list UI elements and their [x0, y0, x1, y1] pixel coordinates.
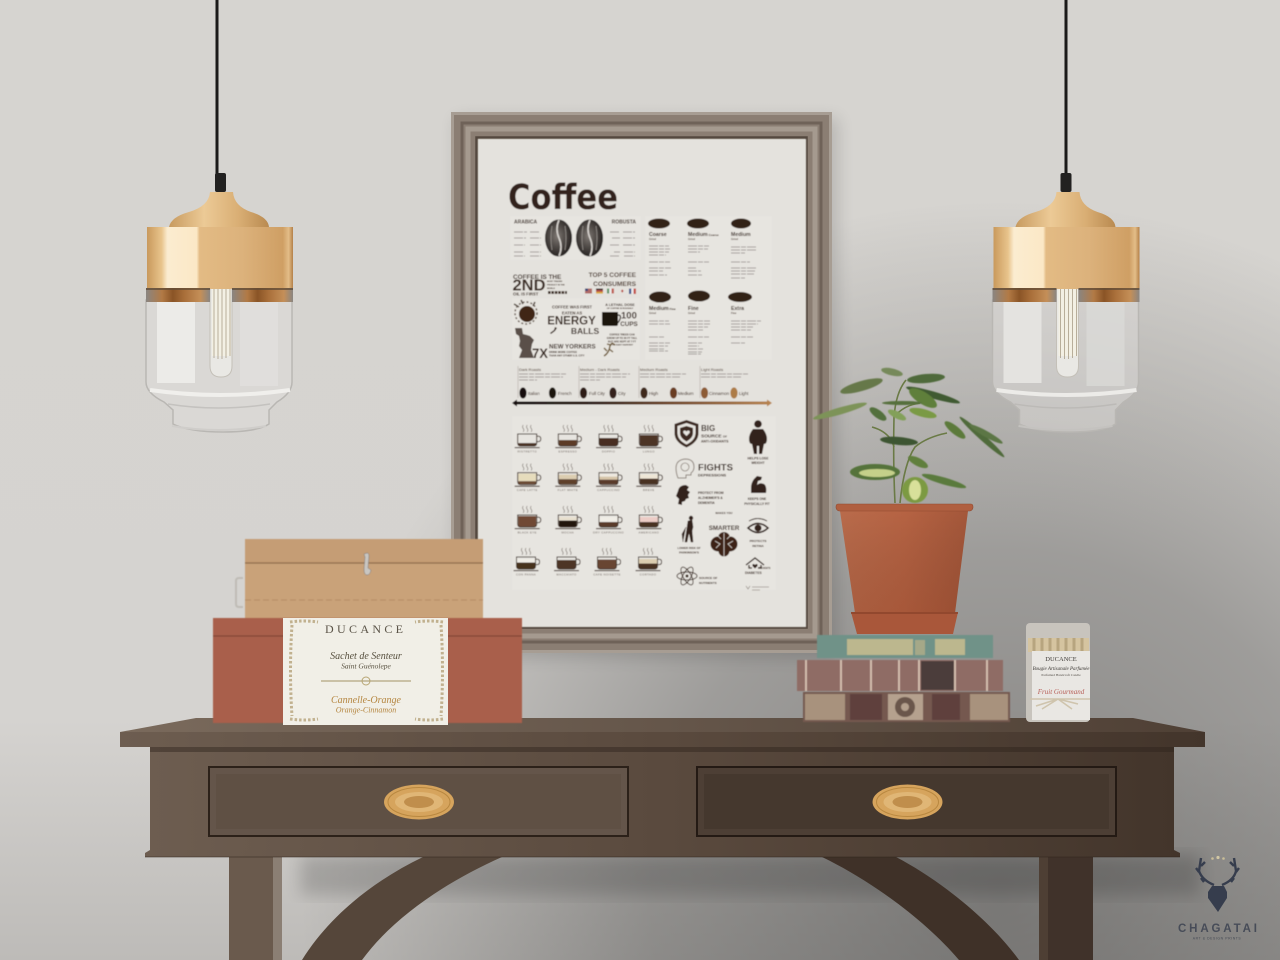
lamp gold cylinder	[994, 227, 1140, 289]
cup: macchiato: MACCHIATO	[556, 572, 577, 576]
cup: cafe noisette	[593, 548, 621, 576]
coffee drinks grid	[514, 425, 662, 576]
table top edge	[120, 732, 1205, 747]
logo deer head and antlers	[1196, 856, 1239, 912]
roast gradient arrow	[512, 400, 772, 406]
grind: extra fine: Extra	[731, 306, 744, 312]
grind: medium-coarse: Medium Coarse	[688, 232, 719, 238]
cup: cappuccino	[596, 464, 622, 492]
wooden picture frame	[451, 112, 832, 653]
health benefits	[674, 420, 771, 590]
fact: coffee first eaten as energy balls: ENERGY	[547, 316, 596, 328]
roast headings: Medium - Dark Roasts	[580, 367, 620, 372]
benefit: muscle arm	[744, 476, 770, 506]
cup: black eye	[515, 506, 541, 534]
roast beans with names: Italian	[528, 391, 540, 396]
benefit: fights depression	[676, 459, 733, 478]
grind: medium-fine	[649, 292, 676, 351]
cup: lungo: LUNGO	[643, 450, 655, 454]
roast headings: Medium Roasts	[640, 367, 668, 372]
fact: coffee is the second most traded product: 2ND	[512, 278, 546, 294]
ducance sachet card	[283, 618, 448, 725]
roast headings: Light Roasts	[701, 367, 723, 372]
roast beans with names: Full City	[589, 391, 606, 396]
fact: coffee trees: GROW UP TO 30 FT TALL	[607, 337, 638, 340]
grind: medium: Grind	[731, 237, 738, 241]
benefit: antioxidants shield	[674, 420, 729, 448]
grind: extra fine	[728, 292, 761, 343]
lamp bulb	[1056, 288, 1078, 377]
lamp glass body	[992, 300, 1138, 432]
illustration: coffee sprig	[604, 343, 615, 356]
fact: 7x new yorkers: THAN ANY OTHER U.S. CITY	[549, 354, 585, 358]
fact: 7x new yorkers: DRINK MORE COFFEE	[549, 350, 577, 354]
benefit: alzheimer's and dementia	[676, 485, 724, 505]
roast beans with names: Cinnamon	[709, 391, 730, 396]
fact: top 5 coffee consumers with flags: CONSUMERS	[593, 281, 637, 288]
lamp copper band	[992, 288, 1140, 302]
brown book	[797, 660, 1003, 691]
roast beans with names: Medium	[678, 391, 694, 396]
benefit: fights depression: DEPRESSIONS	[698, 472, 727, 478]
cup: lungo	[636, 425, 662, 454]
cup: macchiato	[554, 548, 580, 576]
lamp gold cylinder	[147, 227, 293, 289]
left leg	[229, 857, 282, 960]
illustration: statue of liberty	[515, 328, 534, 358]
logo wordmark: CHAGATAI	[1178, 923, 1257, 935]
right curved brace	[822, 857, 1019, 960]
cup: dry cappuccino	[593, 506, 624, 534]
fact: coffee trees: FOR EASY HARVEST	[611, 344, 634, 346]
ornate book	[803, 692, 1010, 722]
roast scale	[512, 366, 772, 406]
card scent text	[331, 695, 402, 714]
lamp copper band	[146, 288, 293, 302]
benefit: weight loss figure: HELPS LOSE	[748, 456, 769, 460]
cup: dry cappuccino: DRY CAPPUCCINO	[593, 530, 624, 534]
benefit: fights depression: FIGHTS	[698, 462, 733, 472]
fact: coffee trees: COFFEE TREES CAN	[609, 334, 635, 336]
table surface	[120, 718, 1205, 732]
benefit: antioxidants shield: SOURCE OF	[701, 434, 727, 440]
benefit: protects retina eye: PROTECTS	[750, 539, 766, 543]
fact: coffee is the second most traded product	[512, 274, 567, 296]
grind: medium: Medium	[731, 232, 751, 238]
benefit: antioxidants shield: BIG	[701, 424, 715, 433]
lamp bulb	[210, 288, 232, 377]
cup: con panna	[514, 548, 540, 576]
ducance candle: DUCANCE	[1045, 656, 1077, 663]
frame shadow	[456, 118, 838, 658]
ducance candle: Fruit Gourmand	[1037, 688, 1085, 696]
fact: lethal dose of coffee is 100 cups: A LETHAL DOSE	[605, 303, 635, 307]
fact: coffee is the second most traded product: PRODUCT IN THE	[547, 284, 565, 286]
fact: lethal dose of coffee is 100 cups: OF COFFEE IS ROUGHLY	[607, 308, 634, 310]
right leg	[1039, 857, 1093, 960]
shadow under table apron	[300, 855, 1200, 895]
chagatai logo	[1178, 856, 1257, 940]
fact: 7x new yorkers	[532, 344, 596, 361]
fact: 7x new yorkers: NEW YORKERS	[549, 344, 596, 350]
benefit: prevents diabetes: DIABETES	[745, 571, 762, 575]
lamp gold cap	[1016, 192, 1116, 227]
cup: mocha	[555, 506, 581, 534]
cup: ristretto	[515, 425, 541, 454]
grind: fine: Fine	[688, 306, 699, 312]
pot saucer	[851, 612, 958, 634]
grind: extra fine: Fine	[731, 311, 737, 315]
cup: americano	[636, 506, 662, 534]
fact: top 5 coffee consumers with flags: TOP 5 COFFEE	[589, 272, 637, 279]
benefit: source of nutrients atom: SOURCE OF	[699, 576, 718, 580]
cup: espresso	[555, 425, 581, 454]
cup: doppio: DOPPIO	[602, 450, 616, 454]
roast beans with names: High	[649, 391, 659, 396]
poster title: Coffee	[508, 178, 618, 218]
benefit: prevents diabetes	[745, 558, 771, 575]
cup: mocha: MOCHA	[562, 530, 574, 534]
ducance candle	[1026, 623, 1090, 722]
benefit: muscle arm: PHYSICALLY FIT	[744, 502, 770, 506]
cup: americano: AMERICANO	[638, 530, 660, 534]
robusta column: ROBUSTA	[612, 220, 636, 226]
poster sheet	[478, 139, 806, 627]
grind: fine: Grind	[688, 311, 695, 315]
cup: ristretto: RISTRETTO	[517, 450, 537, 454]
fact: top 5 coffee consumers with flags	[585, 272, 637, 294]
roast beans with names: City	[618, 391, 626, 396]
grind: coarse: Grind	[649, 237, 656, 241]
grind: coarse: Coarse	[649, 232, 667, 238]
fact: coffee is the second most traded product: COFFEE IS THE	[513, 274, 562, 281]
wooden console table	[120, 718, 1205, 960]
poster panels	[510, 216, 776, 590]
ducance candle: Parfumed Handcraft Candle	[1041, 673, 1081, 677]
fact: coffee is the second most traded product: OIL IS FIRST	[513, 292, 539, 296]
benefit: makes you smarter brain	[709, 511, 740, 557]
benefit: alzheimer's and dementia: DEMENTIA	[698, 501, 715, 505]
terracotta pot	[836, 504, 973, 634]
benefit: weight loss figure	[748, 420, 769, 465]
benefit: antioxidants shield: ANTI-OXIDANTS	[701, 440, 729, 444]
fact: coffee is the second most traded product: MOST TRADED	[547, 280, 563, 283]
cup: cafe latte: CAFE LATTE	[517, 488, 538, 492]
table lower moulding	[145, 850, 1180, 857]
cup: doppio	[596, 425, 622, 454]
left pendant lamp	[146, 0, 293, 432]
benefit: source of nutrients atom	[677, 565, 718, 587]
plant stems	[872, 380, 947, 503]
cup: breve	[636, 464, 662, 492]
right drawer	[696, 766, 1117, 837]
lamp cord and connector	[1060, 0, 1072, 192]
lamp glass body	[146, 300, 292, 432]
benefit: parkinson's: PARKINSON'S	[679, 550, 699, 554]
stacked books	[797, 635, 1010, 722]
benefit: protects retina eye: RETINA	[752, 544, 765, 548]
fact: lethal dose of coffee is 100 cups: 100	[621, 310, 637, 322]
green book	[817, 635, 993, 658]
right drawer brass handle	[872, 784, 942, 820]
grind: fine	[688, 290, 710, 354]
robusta column	[610, 220, 636, 256]
card product text: Sachet de Senteur	[330, 651, 402, 662]
potted plant	[812, 366, 1006, 634]
arabica column	[514, 220, 541, 256]
illustration: coffee plant circle	[514, 300, 537, 324]
roast beans with names: French	[558, 391, 572, 396]
benefit: source of nutrients atom: NUTRIENTS	[699, 581, 717, 585]
benefit: prevents diabetes: PREVENTS	[758, 568, 771, 570]
table apron	[150, 747, 1174, 851]
card ornamental corners	[290, 621, 443, 720]
poster publisher mark	[746, 586, 769, 590]
red wooden box	[213, 618, 522, 723]
benefit: parkinson's: LOWER RISK OF	[677, 546, 701, 550]
cup: black eye: BLACK EYE	[518, 530, 537, 534]
wooden chest	[236, 539, 483, 621]
plant leaves	[812, 366, 1006, 503]
cup: cafe latte	[515, 464, 541, 492]
left drawer	[208, 766, 629, 837]
roast headings: Dark Roasts	[519, 367, 541, 372]
roast beans with names: Light	[739, 391, 749, 396]
cup: flat white	[555, 464, 581, 492]
grind: coarse	[648, 218, 671, 275]
benefit: muscle arm: KEEPS ONE	[748, 497, 766, 501]
benefit: parkinson's	[677, 516, 701, 554]
fact: coffee first eaten as energy balls	[547, 304, 599, 336]
benefit: alzheimer's and dementia: PROTECT FROM	[698, 491, 724, 495]
cup: cafe noisette: CAFE NOISETTE	[593, 572, 621, 576]
grind: medium	[731, 218, 757, 278]
grind: medium-fine: Medium Fine	[649, 306, 676, 312]
cup: breve: BREVE	[643, 488, 655, 492]
benefit: alzheimer's and dementia: ALZHEIMER'S &	[698, 496, 723, 500]
grind: medium-coarse	[687, 218, 719, 275]
fact: coffee trees	[607, 334, 638, 346]
cup: cappuccino: CAPPUCCINO	[597, 488, 620, 492]
grind: medium-coarse: Grind	[688, 237, 695, 241]
fact: coffee is the second most traded product: WORLD	[547, 288, 555, 290]
fact: lethal dose of coffee is 100 cups: CUPS	[620, 321, 638, 328]
cup: cortado	[636, 548, 662, 576]
roast dividers	[518, 366, 700, 398]
grind guide	[648, 218, 761, 354]
fact: coffee trees: BUT ARE KEPT AT 7 FT	[608, 340, 636, 344]
lamp gold cap	[169, 192, 269, 227]
logo tagline: ART & DESIGN PRINTS	[1193, 936, 1241, 940]
card product text: Saint Guénolepe	[341, 662, 392, 670]
card product text	[321, 651, 411, 685]
lamp cord and connector	[215, 0, 226, 192]
left drawer brass handle	[384, 784, 454, 820]
grind: medium-fine: Grind	[649, 311, 656, 315]
card scent text: Cannelle-Orange	[331, 695, 402, 706]
card brand: DUCANCE	[325, 622, 403, 636]
fact: coffee first eaten as energy balls: COFFEE WAS FIRST	[552, 304, 593, 310]
fact: coffee first eaten as energy balls: BALLS	[571, 326, 599, 336]
arabica column: ARABICA	[514, 220, 537, 226]
benefit: makes you smarter brain: MAKES YOU	[716, 511, 732, 515]
cup: cortado: CORTADO	[640, 572, 657, 576]
benefit: makes you smarter brain: SMARTER	[709, 525, 740, 532]
right pendant lamp	[992, 0, 1140, 432]
benefit: protects retina eye	[748, 518, 768, 548]
coffee beans: arabica and robusta	[545, 220, 603, 256]
fact: 7x new yorkers: 7X	[532, 345, 549, 361]
card scent text: Orange-Cinnamon	[336, 706, 396, 714]
roast headings	[519, 367, 723, 372]
roast beans with names	[519, 387, 749, 399]
fact: coffee first eaten as energy balls: EATEN AS	[562, 310, 582, 316]
cup: espresso: ESPRESSO	[558, 450, 578, 454]
left curved brace	[302, 857, 502, 960]
cup: flat white: FLAT WHITE	[558, 488, 578, 492]
cup: con panna: CON PANNA	[516, 572, 536, 576]
fact: lethal dose of coffee is 100 cups	[602, 303, 638, 328]
ducance candle: Bougie Artisanale Parfumée	[1033, 667, 1090, 672]
benefit: weight loss figure: WEIGHT	[751, 461, 765, 465]
